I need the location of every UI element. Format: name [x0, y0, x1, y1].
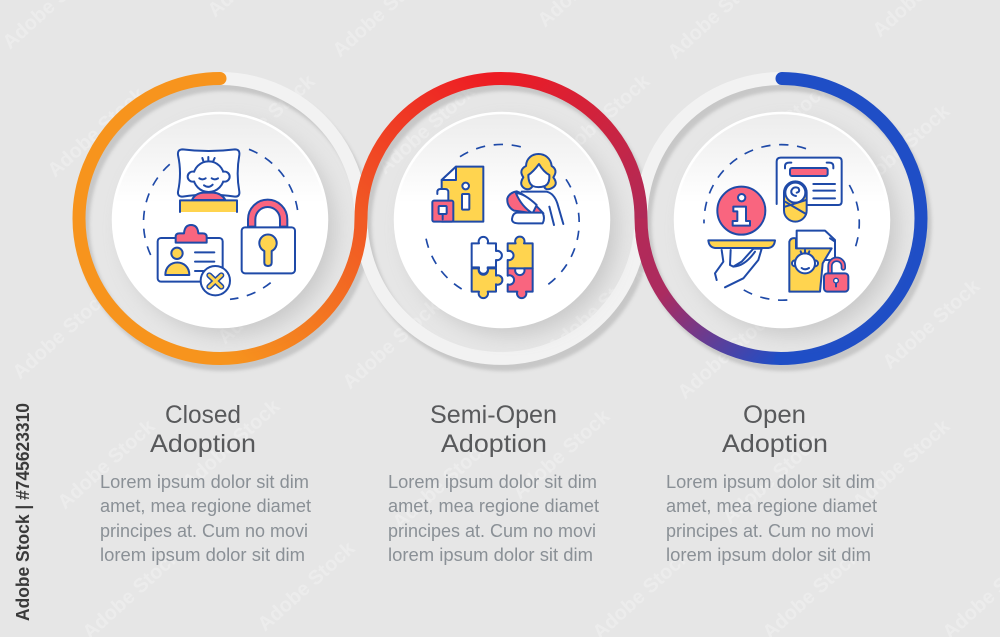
text: semi-open adoption description: amet, mea regione diamet: [388, 495, 599, 516]
label: open adoption: [722, 401, 828, 458]
watermarks: Adobe Stock: [54, 415, 160, 514]
disc: closed adoption: [113, 113, 335, 335]
watermarks: Adobe Stock: [544, 260, 650, 359]
watermarks: Adobe Stock: [339, 295, 445, 394]
watermarks: Adobe Stock: [849, 415, 955, 514]
watermarks: Adobe Stock: [44, 83, 150, 182]
label: semi-open adoption: Adoption: [441, 430, 547, 458]
watermarks: Adobe Stock: [9, 285, 115, 384]
text: semi-open adoption description: lorem ipsum dolor sit dim: [388, 544, 593, 565]
text: open adoption description: principes at. Cum no movi: [666, 520, 874, 541]
text: open adoption description: lorem ipsum dolor sit dim: [666, 544, 871, 565]
label: open adoption: Adoption: [722, 430, 828, 458]
text: semi-open adoption description: Lorem ipsum dolor sit dim: [388, 471, 597, 492]
text: semi-open adoption description: principes at. Cum no movi: [388, 520, 596, 541]
watermarks: Adobe Stock: [374, 80, 480, 179]
icon: closed adoption: [144, 149, 298, 299]
icon: semi-open adoption: [425, 144, 579, 298]
disc: semi-open adoption: [395, 113, 617, 335]
watermarks: Adobe Stock: [214, 250, 320, 349]
watermarks: Adobe Stock: [214, 70, 320, 169]
light ring track: [220, 78, 781, 358]
text: closed adoption description: principes at. Cum no movi: [100, 520, 308, 541]
label: open adoption: Open: [743, 401, 806, 429]
label: closed adoption: Adoption: [150, 430, 256, 458]
watermarks: Adobe Stock: [549, 70, 655, 169]
text: closed adoption description: [100, 471, 311, 565]
text: closed adoption description: lorem ipsum dolor sit dim: [100, 544, 305, 565]
watermarks: Adobe Stock: [254, 537, 360, 636]
coloured ribbon: [79, 78, 921, 358]
text: semi-open adoption description: [388, 471, 599, 565]
text: open adoption description: amet, mea regione diamet: [666, 495, 877, 516]
text: closed adoption description: Lorem ipsum dolor sit dim: [100, 471, 309, 492]
label: semi-open adoption: Semi-Open: [430, 401, 557, 429]
watermarks: Adobe Stock: [879, 275, 985, 374]
watermarks: Adobe Stock: [389, 435, 495, 534]
watermarks: Adobe Stock: [849, 100, 955, 199]
text: open adoption description: [666, 471, 877, 565]
icon: open adoption: [704, 145, 859, 300]
watermarks: Adobe Stock: [509, 405, 615, 504]
text: open adoption description: Lorem ipsum dolor sit dim: [666, 471, 875, 492]
watermarks: Adobe Stock: [674, 305, 780, 404]
watermarks: Adobe Stock: [719, 430, 825, 529]
text: closed adoption description: amet, mea regione diamet: [100, 495, 311, 516]
watermarks: Adobe Stock: [179, 395, 285, 494]
watermarks: Adobe Stock: [729, 77, 835, 176]
disc: open adoption: [675, 113, 897, 335]
label: closed adoption: [150, 401, 256, 458]
stock credit: Adobe Stock | #745623310: [13, 403, 33, 621]
ring shadows: [83, 84, 925, 364]
label: semi-open adoption: [430, 401, 557, 458]
label: closed adoption: Closed: [165, 401, 241, 429]
